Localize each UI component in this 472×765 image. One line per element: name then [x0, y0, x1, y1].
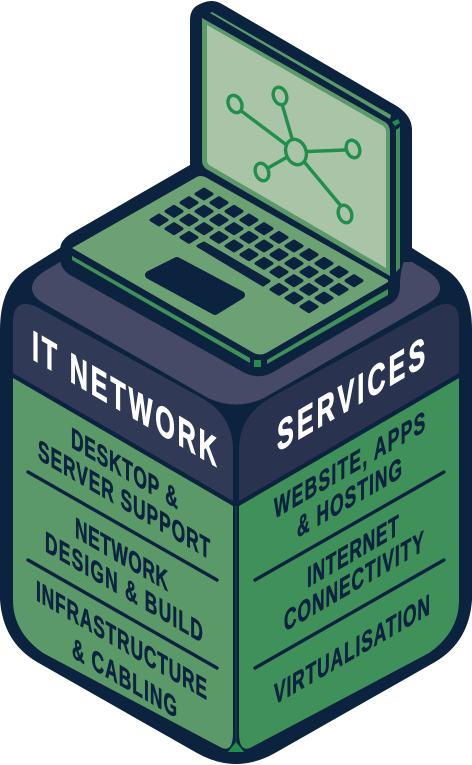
trackpad	[149, 261, 241, 311]
text: internet connectivity: CONNECTIVITY	[284, 525, 424, 639]
box: top face	[32, 262, 440, 404]
lid: right edge strip	[396, 127, 400, 272]
lid: screen	[207, 25, 386, 268]
text: desktop and server support: DESKTOP &	[71, 421, 178, 516]
heading band: right	[239, 304, 459, 501]
text: infrastructure and cabling: INFRASTRUCTURE	[36, 574, 207, 707]
keyboard spacebar	[198, 243, 269, 285]
base: right front strip	[267, 289, 388, 364]
panel: services (right side)	[239, 304, 459, 749]
lid: corner	[392, 119, 400, 126]
heading band: left	[13, 304, 233, 501]
spine: centre edge line and bottom marker	[228, 506, 244, 752]
lid: screen border	[202, 18, 390, 276]
panel fill: right green	[239, 378, 459, 749]
heading: IT NETWORK: IT NETWORK	[32, 321, 217, 476]
text: desktop and server support: SERVER SUPPORT	[38, 433, 210, 567]
text: network design and build: DESIGN & BUILD	[45, 525, 203, 650]
lid: top edge strip	[210, 12, 391, 119]
text: virtualisation: VIRTUALISATION	[274, 588, 430, 712]
base: front corner	[254, 360, 261, 367]
box: navy body	[0, 248, 472, 764]
heading: SERVICES: SERVICES	[277, 327, 425, 461]
text: network design and build: NETWORK	[75, 511, 168, 598]
text: website, apps and hosting: WEBSITE, APPS	[274, 405, 425, 526]
icon: laptop	[60, 1, 412, 376]
base: deck	[72, 176, 388, 354]
panel: IT network (left side)	[13, 304, 233, 749]
laptop: navy outline	[60, 1, 412, 376]
keyboard keys	[151, 189, 362, 312]
panel fill: left green	[13, 378, 233, 749]
screen icon: network diagram	[225, 85, 362, 225]
text: internet connectivity: INTERNET	[307, 509, 399, 595]
base: left front strip	[72, 256, 250, 363]
text: website, apps and hosting: & HOSTING	[297, 451, 402, 545]
text: infrastructure and cabling: & CABLING	[72, 631, 177, 725]
